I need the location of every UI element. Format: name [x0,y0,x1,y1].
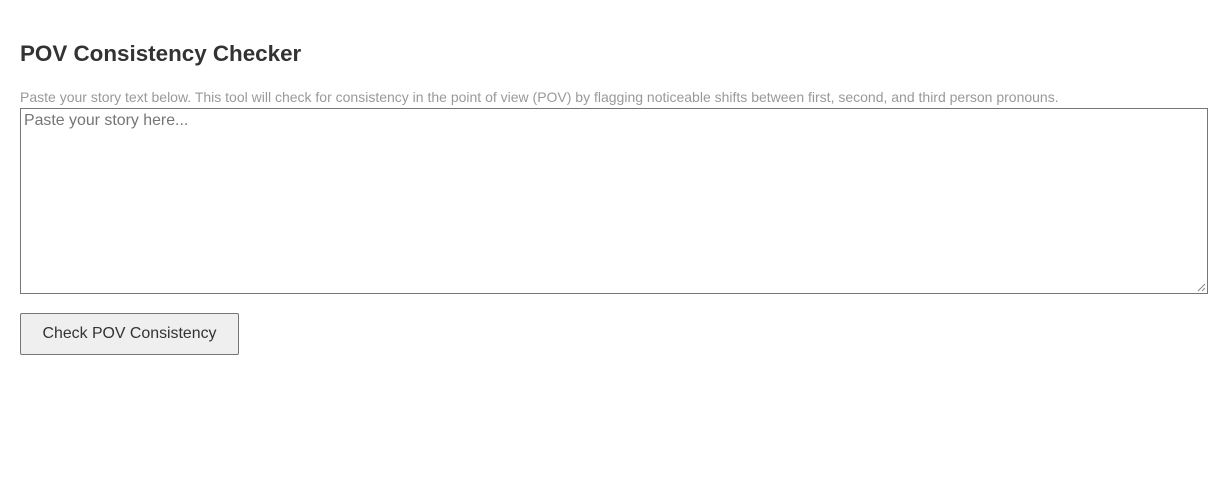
placeholder: Paste your story here... [24,112,188,129]
resize handle [1198,284,1206,292]
title: POV Consistency Checker [20,41,301,66]
text area [20,108,1208,294]
description text: Paste your story text below. This tool will check for consistency in the point of view (POV) by flagging noticeable shifts between first, second, and third person pronouns. [20,89,1059,105]
button: Check POV Consistency [42,325,216,342]
button [20,313,239,355]
